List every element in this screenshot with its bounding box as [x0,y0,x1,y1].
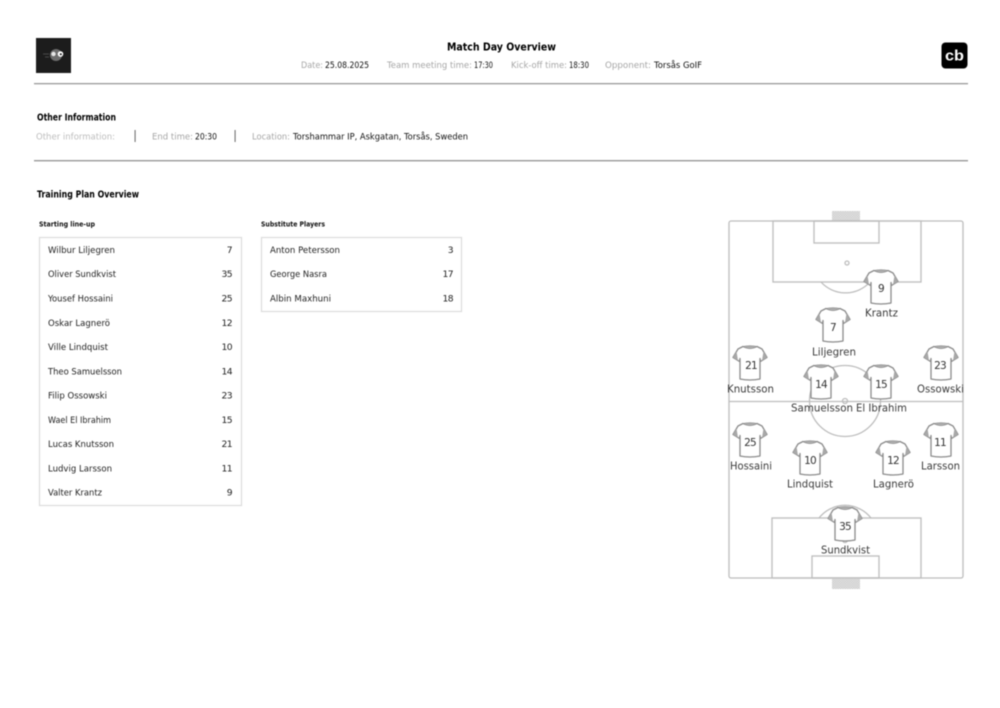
player: Samuelsson 14: Samuelsson [791,402,853,414]
player: El Ibrahim 15: 15 [875,379,887,391]
player: Krantz 9: Krantz [865,306,898,320]
header logo: club badge [36,38,71,73]
table: starting line-up: 11 [222,464,232,474]
player: Ossowski 23: 23 [934,360,946,372]
table: starting line-up: Yousef Hossaini [47,294,113,304]
player: Knutsson 21 [727,346,774,396]
table: substitute players [262,238,462,312]
table: substitute players: 17 [442,269,454,280]
other information row: Torshammar IP, Askgatan, Torsås, Sweden [292,132,468,142]
match details row: 18:30 [569,60,589,71]
icon: cb logo: cb [945,48,964,64]
match details row: Team meeting time: [386,60,472,71]
player: Sundkvist 35: 35 [839,521,851,533]
player: Hossaini 25: 25 [744,437,756,449]
table: substitute players: Albin Maxhuni [270,294,331,304]
player: Liljegren 7: 7 [830,322,836,334]
table: substitute players: George Nasra [270,269,327,280]
match details row: 25.08.2025 [325,60,369,71]
heading: starting line-up: Starting line-up [39,220,95,228]
match details row: Date: [301,60,323,71]
player: El Ibrahim 15: El Ibrahim [856,402,907,414]
player: Hossaini 25: Hossaini [730,460,772,472]
heading: other information: Other Information [37,112,116,124]
player: Lindquist 10: 10 [804,455,816,467]
other information row [36,130,468,142]
table: starting line-up: Oskar Lagnerö [48,318,110,329]
table: starting line-up: 21 [222,439,232,450]
player: Samuelsson 14: 14 [815,379,828,391]
table: starting line-up: 23 [222,390,233,402]
other information row: Other information: [36,132,115,142]
table: starting line-up: Valter Krantz [48,488,102,498]
table: starting line-up: 35 [222,269,233,280]
player: Lagnerö 12 [873,441,914,490]
player: Liljegren 7: Liljegren [812,346,856,358]
table: starting line-up: 7 [227,245,233,256]
player: Lindquist 10 [787,441,834,490]
table: substitute players: 18 [442,294,454,304]
player: Ossowski 23 [917,346,964,396]
table: substitute players: 3 [448,245,454,256]
table: starting line-up: 25 [222,294,233,304]
other information row: Location: [252,132,290,142]
table: starting line-up: Oliver Sundkvist [48,269,116,280]
player: Krantz 9: 9 [878,283,884,295]
match details row: 17:30 [474,60,493,71]
player: Krantz 9 [864,270,898,320]
player: Larsson 11: Larsson [921,460,960,472]
heading: substitute players: Substitute Players [261,220,325,228]
football pitch lines [729,211,963,589]
player: El Ibrahim 15 [856,365,907,414]
table: starting line-up [40,238,242,506]
player: Lagnerö 12: Lagnerö [873,478,914,490]
title: Match Day Overview [447,40,556,54]
player: Lindquist 10: Lindquist [787,478,834,490]
match details row: Kick-off time: [511,60,567,71]
table: starting line-up: 14 [222,366,233,378]
table: starting line-up: 12 [222,318,232,329]
player: Sundkvist 35 [821,507,871,556]
player: Liljegren 7 [812,308,856,358]
player: Larsson 11 [921,423,960,472]
table: starting line-up: 15 [222,415,233,426]
player: Knutsson 21: 21 [745,360,757,372]
table: starting line-up: 10 [222,342,233,353]
table: substitute players: Anton Petersson [270,245,340,256]
other information row: End time: [152,132,193,142]
match details row: Torsås GoIF [653,60,702,71]
table: starting line-up: Theo Samuelsson [47,366,122,378]
player: Ossowski 23: Ossowski [917,382,964,396]
player: Sundkvist 35: Sundkvist [821,544,871,556]
table: starting line-up: Filip Ossowski [48,390,107,402]
player: Hossaini 25 [730,423,772,472]
heading: training plan overview: Training Plan Overview [37,190,139,200]
match details row: Opponent: [605,60,651,71]
player: Larsson 11: 11 [934,437,946,449]
player: Samuelsson 14 [791,365,853,414]
table: starting line-up: Wilbur Liljegren [48,245,115,256]
table: starting line-up: 9 [227,488,233,498]
table: starting line-up: Wael El Ibrahim [48,415,111,426]
player: Lagnerö 12: 12 [887,455,899,467]
table: starting line-up: Ludvig Larsson [48,464,112,474]
match details row [301,60,702,71]
icon: cb logo [942,42,968,68]
other information row: 20:30 [195,132,217,142]
table: starting line-up: Lucas Knutsson [48,439,114,450]
player: Knutsson 21: Knutsson [727,382,774,396]
table: starting line-up: Ville Lindquist [48,342,108,353]
